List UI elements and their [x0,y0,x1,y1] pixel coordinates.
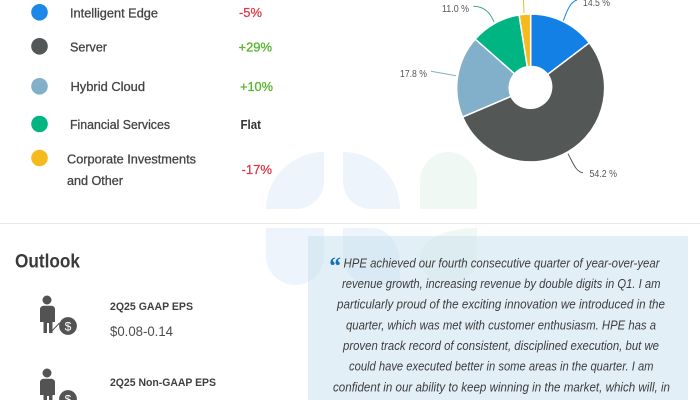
donut value labels: 54.2 % [590,169,617,180]
slice: Server 54.2% [463,43,605,162]
background watermark shapes [266,152,477,285]
text: 2Q25 GAAP EPS: 2Q25 GAAP EPS [110,301,193,313]
donut chart [457,14,605,162]
quote text: confident in our ability to keep winning in the market, which will, in [333,379,670,394]
panel: segment legend [31,4,273,188]
quote text: particularly proud of the exciting innovation we introduced in the [336,297,665,312]
legend row: Server [31,38,272,55]
icon: person with dollar coin (GAAP) [40,296,77,335]
legend row: Financial Services: Financial Services [70,117,170,132]
legend row: Server: +29% [238,40,272,54]
slice: Corporate Investments 2.5% [519,14,531,67]
legend row: Corporate Investments and Other [31,150,272,188]
donut value labels: 17.8 % [400,69,427,80]
quote text: proven track record of consistent, disciplined execution, but we [342,338,659,353]
legend row: Intelligent Edge: Intelligent Edge [70,6,158,20]
legend row: Corporate Investments and Other: and Other [67,173,124,188]
heading: Outlook: Outlook [15,252,80,273]
legend row: Hybrid Cloud [31,78,273,95]
legend row: Financial Services [31,116,262,132]
icon: person with dollar coin (GAAP): $ [65,320,72,334]
quote text: quarter, which was met with customer enthusiasm. HPE has a [346,317,656,332]
quote text [333,256,670,394]
quote text: could have executed better in some areas in the quarter. I am [349,359,654,374]
legend row: Intelligent Edge: -5% [239,5,262,20]
legend row: Intelligent Edge [31,4,262,21]
text: 2Q25 GAAP EPS [110,301,193,339]
legend row: Corporate Investments and Other: Corporate Investments [67,152,196,166]
panel: CEO quote [308,236,688,400]
icon: opening quote mark: “ [328,253,341,280]
section divider [0,223,700,224]
legend row: Financial Services: Flat [240,117,262,132]
donut value labels [400,0,617,180]
text: 2Q25 GAAP EPS: $0.08-0.14 [110,323,173,339]
legend row: Hybrid Cloud: Hybrid Cloud [70,79,145,94]
slice: Hybrid Cloud 17.8% [457,39,515,117]
legend row: Hybrid Cloud: +10% [240,79,273,94]
quote text: revenue growth, increasing revenue by double digits in Q1. I am [342,276,661,291]
quote text: HPE achieved our fourth consecutive quarter of year-over-year [344,256,660,270]
slice: Intelligent Edge 14.5% [531,14,589,74]
legend row: Server: Server [70,40,108,54]
donut leader lines [431,0,583,173]
donut value labels: 11.0 % [442,4,469,15]
slice: Financial Services 11.0% [475,15,527,74]
legend row: Corporate Investments and Other: -17% [242,162,272,177]
icon: person with dollar coin (Non-GAAP) [40,368,77,400]
text: 2Q25 Non-GAAP EPS: 2Q25 Non-GAAP EPS [110,377,216,389]
